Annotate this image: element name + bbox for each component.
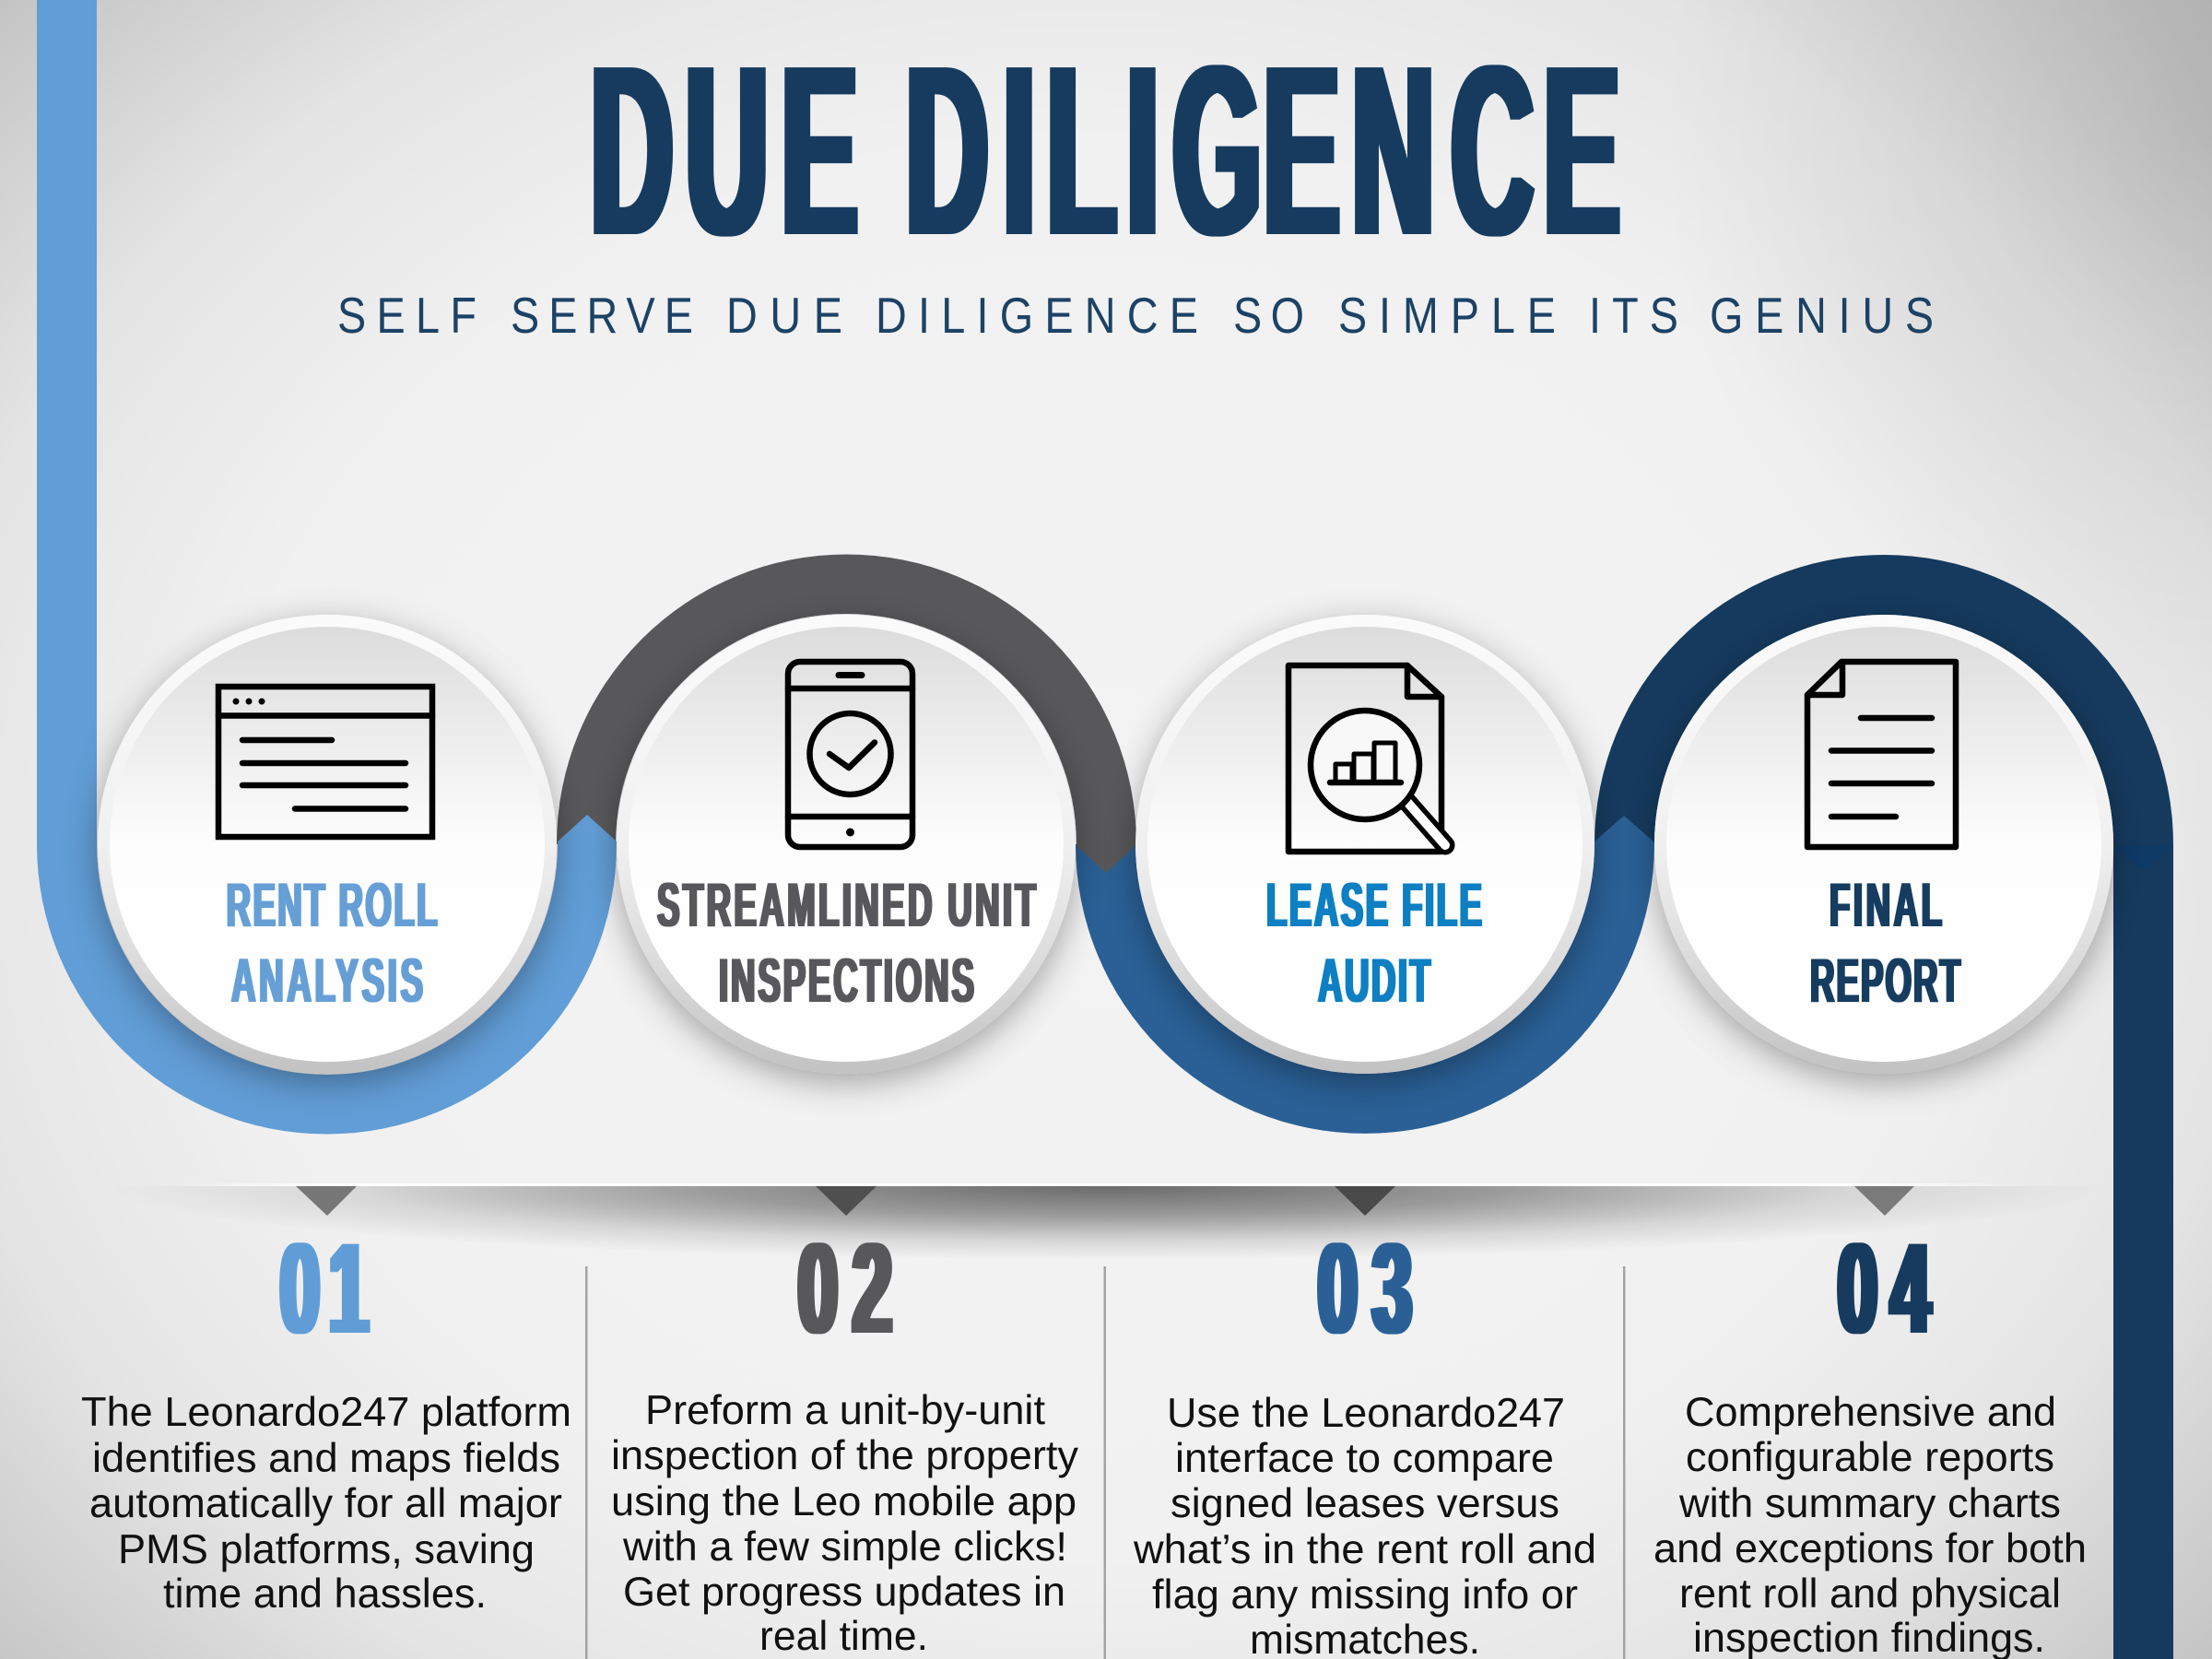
description 03: Use the Leonardo247 [1167, 1391, 1565, 1436]
number 01: 01 [280, 1217, 369, 1360]
label: REPORT [1810, 946, 1960, 1016]
subtitle: SERVE [511, 287, 693, 344]
title: DUE DILIGENCE [591, 15, 1619, 286]
description 03 [1133, 1391, 1596, 1659]
description 02: real time. [759, 1614, 928, 1659]
circle disc [1654, 615, 2113, 1074]
label [1810, 870, 1960, 1016]
description 04: configurable reports [1686, 1435, 2054, 1480]
pointer 1 [296, 1186, 357, 1216]
subtitle [337, 287, 1934, 344]
description 02: using the Leo mobile app [611, 1479, 1077, 1524]
icon: browser window [218, 687, 432, 837]
column dividers [585, 1266, 1626, 1659]
description 01: PMS platforms, saving [118, 1527, 535, 1572]
ribbon segment 2: unit inspections arch [557, 555, 1136, 873]
label: STREAMLINED UNIT [657, 870, 1036, 940]
circle disc [1135, 615, 1594, 1074]
pointer 4 [1854, 1186, 1914, 1216]
description 04 [1653, 1390, 2087, 1659]
description 01: automatically for all major [89, 1481, 562, 1526]
label: LEASE FILE [1266, 870, 1482, 940]
description 02: inspection of the property [611, 1433, 1079, 1478]
description 04: rent roll and physical [1679, 1571, 2061, 1617]
description 01: time and hassles. [163, 1571, 487, 1617]
panel: lease file audit circle [1135, 615, 1594, 1074]
description 02: Get progress updates in [623, 1570, 1065, 1615]
label [1266, 870, 1482, 1016]
label: INSPECTIONS [719, 946, 974, 1016]
subtitle: DUE [726, 287, 842, 344]
description 02: with a few simple clicks! [622, 1524, 1067, 1570]
label: ANALYSIS [231, 946, 423, 1016]
label: FINAL [1830, 870, 1942, 940]
number 03: 03 [1318, 1217, 1412, 1360]
icon: phone with check [788, 662, 912, 847]
panel: final report circle [1654, 615, 2113, 1074]
subtitle: ITS [1589, 287, 1678, 344]
description 03: signed leases versus [1171, 1481, 1559, 1526]
icon: document with magnifier [1288, 665, 1445, 852]
description 01 [81, 1390, 571, 1617]
step 02 [611, 1217, 1079, 1659]
step 03 [1133, 1217, 1596, 1659]
label: AUDIT [1318, 946, 1430, 1016]
description 03: flag any missing info or [1152, 1572, 1578, 1618]
shelf shadow with pointers [111, 1183, 2101, 1260]
ribbon segment 3: lease file arc [1076, 816, 1654, 1134]
step 04 [1653, 1217, 2087, 1659]
pointer 2 [816, 1186, 877, 1216]
description 02 [611, 1388, 1079, 1659]
number 04: 04 [1838, 1217, 1930, 1360]
subtitle: SELF [337, 287, 477, 344]
circle disc [617, 615, 1076, 1074]
subtitle: SO [1233, 287, 1304, 344]
label [227, 870, 438, 1016]
label [657, 870, 1036, 1016]
label: RENT ROLL [227, 870, 438, 940]
ribbon segment 4: final report arch and right bar [1594, 555, 2173, 1659]
pointer 3 [1335, 1186, 1395, 1216]
description 02: Preform a unit-by-unit [645, 1388, 1046, 1433]
number 02: 02 [798, 1217, 892, 1360]
description 01: The Leonardo247 platform [81, 1390, 571, 1435]
description 01: identifies and maps fields [92, 1436, 560, 1481]
ribbon segment 1: rent roll bar and arc [37, 0, 617, 1134]
description 03: interface to compare [1175, 1436, 1554, 1481]
subtitle: DILIGENCE [876, 287, 1198, 344]
step 01 [81, 1217, 571, 1617]
description 04: Comprehensive and [1685, 1390, 2056, 1435]
panel: streamlined unit inspections circle [617, 615, 1076, 1074]
description 04: and exceptions for both [1653, 1526, 2087, 1571]
subtitle: SIMPLE [1338, 287, 1556, 344]
icon: document [1807, 662, 1956, 847]
subtitle: GENIUS [1710, 287, 1934, 344]
circle disc [98, 615, 557, 1074]
panel: rent roll analysis circle [98, 615, 557, 1074]
description 04: with summary charts [1678, 1481, 2061, 1526]
description 03: what’s in the rent roll and [1133, 1527, 1596, 1572]
